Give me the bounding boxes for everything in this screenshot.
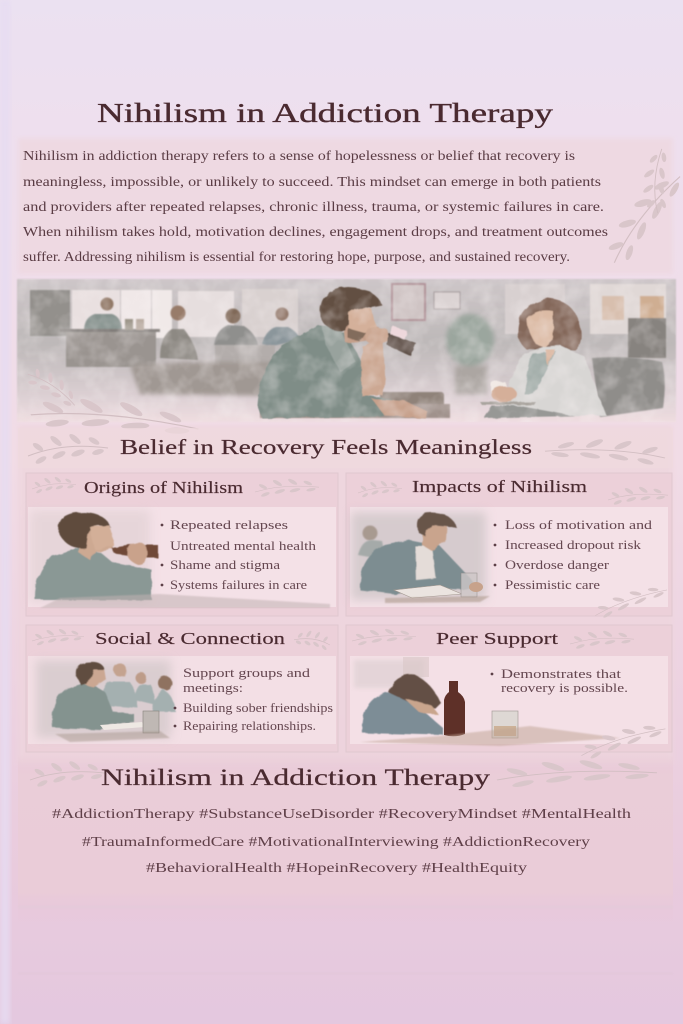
bullet list: Systems failures in care (170, 577, 307, 592)
illustration: support group around table (36, 660, 176, 742)
heading: Social & Connection (95, 629, 285, 648)
intro text block: Nihilism in addiction therapy refers to a sense of hopelessness or belief that recovery is (23, 148, 575, 163)
icon: leaf flourish (595, 146, 683, 270)
panel: impacts of nihilism (346, 473, 672, 621)
panel: origins of nihilism (26, 473, 338, 616)
hashtags: #TraumaInformedCare #MotivationalInterviewing #AddictionRecovery (82, 834, 590, 849)
section heading with flourishes: Belief in Recovery Feels Meaningless (120, 435, 532, 459)
panel: social and connection (26, 625, 338, 752)
hero illustration: man drinking beside therapist (17, 279, 676, 449)
background windows and wall art (30, 284, 666, 358)
bullet list (161, 517, 317, 592)
bullet list: Increased dropout risk (505, 537, 642, 552)
bullet list: recovery is possible. (501, 680, 628, 695)
bullet list: Overdose danger (505, 557, 610, 572)
bullet list: Repairing relationships. (183, 718, 316, 733)
plant (446, 314, 494, 394)
footer heading with flourishes (30, 759, 657, 790)
intro text block: suffer. Addressing nihilism is essential for restoring hope, purpose, and sustained recovery. (23, 249, 570, 264)
bullet list: Repeated relapses (170, 517, 288, 532)
illustration: man at table with notebook (351, 512, 490, 603)
bullet list (491, 666, 628, 695)
intro text block: meaningless, impossible, or unlikely to succeed. This mindset can emerge in both patients (23, 174, 601, 189)
bar and background patrons (60, 298, 300, 367)
bullet list (494, 517, 670, 621)
hashtags: #BehavioralHealth #HopeinRecovery #HealthEquity (146, 860, 527, 875)
bullet list: Demonstrates that (501, 666, 621, 681)
hashtags: #AddictionTherapy #SubstanceUseDisorder #RecoveryMindset #MentalHealth (52, 806, 631, 821)
bullet list: Building sober friendships (183, 700, 333, 715)
heading: Origins of Nihilism (84, 478, 243, 497)
man's sofa (130, 362, 300, 396)
illustration: man drinking from bottle (30, 510, 330, 608)
title: Nihilism in Addiction Therapy (97, 98, 554, 128)
illustration: man slumped beside bottle (354, 657, 668, 762)
panel: peer support (346, 625, 672, 762)
woman (480, 298, 606, 418)
intro text block: When nihilism takes hold, motivation declines, engagement drops, and treatment outcomes (23, 224, 608, 239)
icon: leaf flourish (23, 360, 201, 449)
heading: Impacts of Nihilism (412, 477, 587, 496)
section heading with flourishes (18, 428, 673, 468)
bullet list: Loss of motivation and (505, 517, 653, 532)
intro text block: and providers after repeated relapses, chronic illness, trauma, or systemic failures in care. (23, 199, 604, 214)
bullet list: Support groups and (183, 665, 311, 680)
intro text block (23, 146, 683, 270)
hashtags (52, 806, 631, 875)
bullet list: meetings: (183, 680, 243, 695)
heading: Peer Support (436, 629, 559, 648)
bullet list (174, 665, 333, 733)
therapist's sofa (592, 357, 665, 417)
bullet list: Pessimistic care (505, 577, 600, 592)
footer heading with flourishes: Nihilism in Addiction Therapy (101, 765, 491, 790)
man (257, 287, 428, 418)
bullet list: Untreated mental health (170, 538, 317, 553)
bullet list: Shame and stigma (170, 557, 280, 572)
watercolour mottling (17, 279, 676, 422)
